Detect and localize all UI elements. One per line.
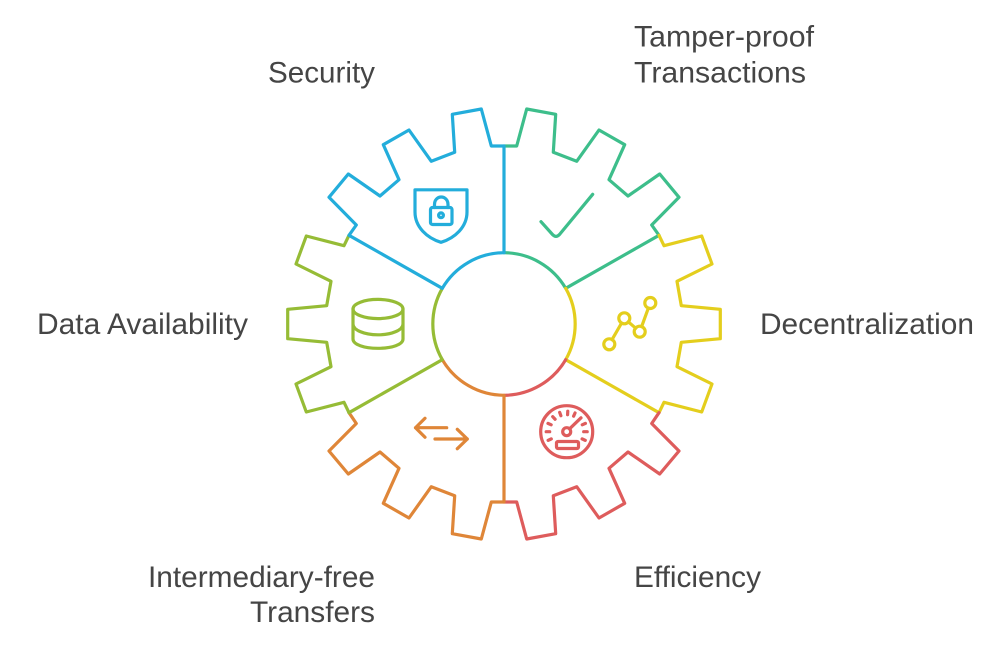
- label: tamper-proof transactions: Tamper-proof: [634, 21, 815, 54]
- segment: tamper-proof transactions (green): [504, 109, 679, 288]
- label: intermediary-free transfers: [148, 561, 375, 629]
- icon: shield with padlock: [415, 190, 467, 242]
- label: data availability: Data Availability: [37, 308, 248, 341]
- label: decentralization: Decentralization: [760, 308, 974, 341]
- icon: check mark: [541, 194, 593, 236]
- label: efficiency: Efficiency: [634, 561, 761, 594]
- icon: connected nodes: [604, 298, 656, 350]
- segment: data availability (lime): [288, 235, 442, 413]
- segment: efficiency (red): [504, 360, 679, 539]
- icon: exchange arrows: [416, 418, 467, 449]
- label: intermediary-free transfers: Intermediary-free: [148, 561, 375, 594]
- segment: intermediary-free transfers (orange): [329, 360, 504, 539]
- icon: speedometer: [541, 406, 593, 458]
- label: tamper-proof transactions: Transactions: [634, 57, 806, 90]
- segment: decentralization (yellow): [566, 235, 720, 413]
- label: security: Security: [268, 57, 375, 90]
- label: tamper-proof transactions: [634, 21, 815, 90]
- segment: security (blue): [329, 109, 504, 288]
- icon: database: [353, 299, 403, 348]
- label: intermediary-free transfers: Transfers: [250, 596, 375, 629]
